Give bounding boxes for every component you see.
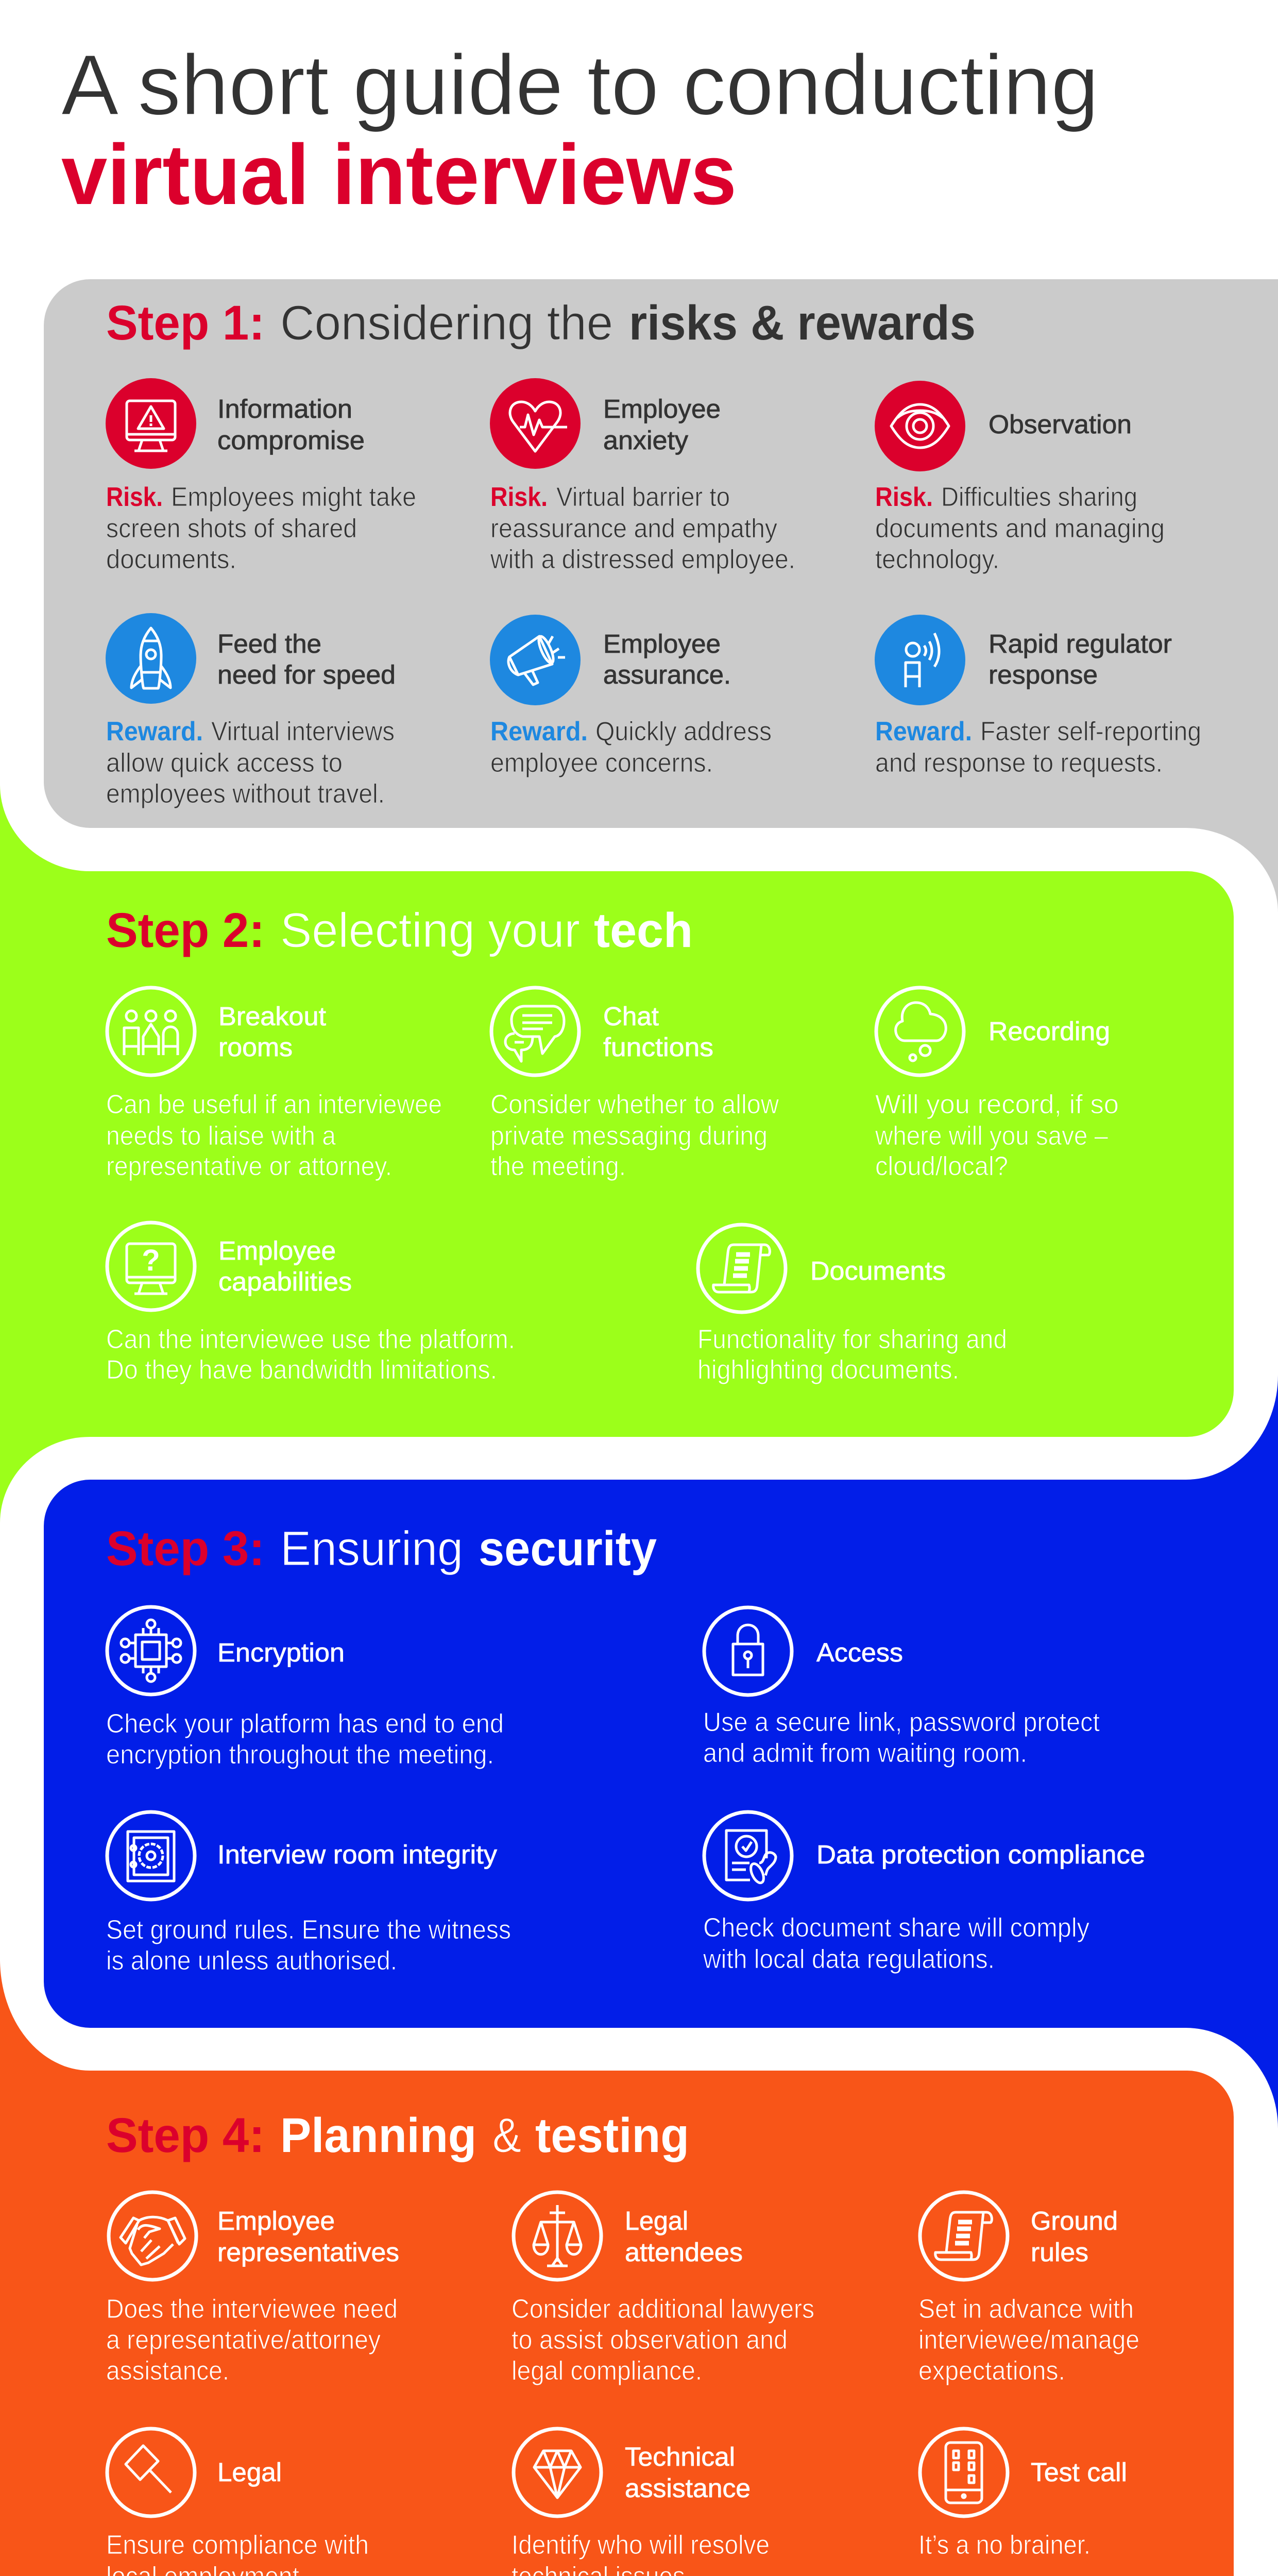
card: information compromise [106, 378, 416, 574]
title: employee capabilities: Employee [218, 1236, 336, 1265]
icon: smartphone [920, 2429, 1008, 2516]
title: employee anxiety: Employee [603, 394, 721, 423]
title: employee assurance: assurance. [603, 660, 731, 689]
body: observation: technology. [875, 545, 999, 574]
card: recording [875, 988, 1119, 1181]
title: technical assistance [625, 2442, 751, 2503]
body: employee assurance: Quickly address [595, 717, 772, 747]
icon: monitor question: ? [142, 1244, 160, 1277]
body: observation: Risk. [875, 482, 933, 512]
title: A short guide to conducting [61, 38, 1099, 133]
body: feed the need for speed: Virtual interviews [211, 717, 395, 747]
title: employee anxiety: anxiety [603, 426, 689, 455]
heading: step 3: Ensuring [280, 1521, 463, 1576]
icon: megaphone [490, 615, 581, 705]
title: access: Access [816, 1638, 903, 1667]
title: technical assistance: Technical [625, 2442, 735, 2471]
body: legal attendees: legal compliance. [512, 2356, 702, 2386]
background colour corners behind white ribbons [0, 762, 1278, 2576]
body: data protection compliance [703, 1913, 1089, 1974]
body: information compromise: Risk. [106, 482, 163, 512]
body: employee capabilities: Can the interviewee use the platform. [106, 1325, 515, 1354]
body: ground rules [918, 2294, 1139, 2386]
title: breakout rooms: rooms [218, 1032, 293, 1062]
body: observation: documents and managing [875, 514, 1165, 544]
title: employee assurance: Employee [603, 629, 721, 658]
title: employee assurance [603, 629, 731, 689]
body: employee representatives: assistance. [106, 2356, 229, 2386]
title: legal attendees: attendees [625, 2238, 743, 2267]
body: employee anxiety: Virtual barrier to [556, 482, 730, 512]
card: feed the need for speed [106, 613, 396, 809]
body: feed the need for speed: employees without travel. [106, 779, 385, 809]
body: breakout rooms: needs to liaise with a [106, 1121, 336, 1151]
body: interview room integrity [106, 1915, 511, 1976]
body: encryption: Check your platform has end to end [106, 1709, 504, 1739]
icon: scales of justice [514, 2192, 601, 2280]
icon: diamond [514, 2429, 601, 2516]
body: legal [106, 2530, 369, 2576]
body: information compromise: screen shots of shared [106, 514, 357, 544]
panel: step 3 ensuring security [44, 1480, 1278, 2028]
card: chat functions [490, 988, 779, 1181]
body: data protection compliance: with local data regulations. [703, 1944, 995, 1974]
title: rapid regulator response: response [989, 660, 1098, 689]
title: documents: Documents [810, 1256, 946, 1285]
body: documents: Functionality for sharing and [697, 1325, 1007, 1354]
body: recording: Will you record, if so [875, 1090, 1119, 1120]
title: breakout rooms [218, 1002, 326, 1062]
title: employee capabilities: capabilities [218, 1267, 352, 1296]
body: test call: It’s a no brainer. [918, 2530, 1090, 2560]
body: rapid regulator response: Faster self-reporting [980, 717, 1201, 747]
card: ground rules [918, 2192, 1139, 2386]
body: encryption: encryption throughout the meeting. [106, 1740, 494, 1770]
title: employee representatives: Employee [217, 2206, 335, 2235]
body: feed the need for speed: allow quick access to [106, 748, 343, 778]
body: employee representatives: Does the interviewee need [106, 2294, 398, 2324]
heading: step 2: tech [594, 903, 693, 958]
heading: step 4: Planning [280, 2108, 476, 2163]
body: technical assistance: Identify who will resolve [512, 2530, 770, 2560]
body: documents [697, 1325, 1007, 1385]
title: employee representatives [217, 2206, 399, 2267]
body: employee anxiety [490, 482, 795, 574]
icon: document scroll [698, 1225, 786, 1312]
card: test call [918, 2429, 1127, 2560]
title: ground rules [1031, 2206, 1118, 2267]
icon: microchip [107, 1607, 195, 1694]
body: chat functions: Consider whether to allow [490, 1090, 779, 1120]
title: encryption: Encryption [217, 1638, 345, 1667]
body: ground rules: interviewee/manage [918, 2325, 1139, 2355]
heading: step 1 [106, 296, 976, 350]
body: employee representatives: a representative/attorney [106, 2325, 381, 2355]
heading: step 2 [106, 903, 693, 958]
heading: step 3: Step 3: [106, 1521, 265, 1576]
body: legal: Ensure compliance with [106, 2530, 369, 2560]
body: access [703, 1707, 1100, 1768]
icon: stamped document [704, 1812, 792, 1900]
icon: handshake [109, 2192, 196, 2280]
body: employee anxiety: reassurance and empathy [490, 514, 777, 544]
body: recording: cloud/local? [875, 1151, 1008, 1181]
card: observation [875, 381, 1165, 574]
body: breakout rooms: representative or attorney. [106, 1151, 392, 1181]
body: observation [875, 482, 1165, 574]
body: feed the need for speed: Reward. [106, 717, 203, 747]
title: data protection compliance: Data protection compliance [816, 1840, 1145, 1869]
heading: step 4 [106, 2108, 689, 2163]
icon: three people [107, 988, 195, 1075]
title: observation: Observation [989, 410, 1132, 439]
body: information compromise: Employees might take [171, 482, 416, 512]
card: interview room integrity [106, 1812, 511, 1976]
body: rapid regulator response [875, 717, 1201, 778]
heading: step 2: Selecting your [280, 903, 580, 958]
title: employee capabilities [218, 1236, 352, 1296]
heading: step 1: Considering the [280, 296, 613, 350]
title: information compromise: compromise [217, 426, 365, 455]
title: test call: Test call [1031, 2458, 1127, 2487]
body: employee anxiety: with a distressed employee. [490, 545, 795, 574]
body: employee assurance: Reward. [490, 717, 588, 747]
title: employee anxiety [603, 394, 721, 455]
heading: step 1: Step 1: [106, 296, 265, 350]
body: recording: where will you save – [875, 1121, 1108, 1151]
title: feed the need for speed: Feed the [217, 629, 321, 658]
body: rapid regulator response: Reward. [875, 717, 972, 747]
heading: step 1: risks & rewards [629, 296, 976, 350]
title: chat functions [603, 1002, 713, 1062]
card: access [703, 1607, 1100, 1768]
title: interview room integrity: Interview room integrity [217, 1840, 498, 1869]
icon: cloud storage [876, 988, 964, 1075]
title: virtual interviews [61, 127, 737, 223]
card: employee representatives [106, 2192, 399, 2386]
body: employee assurance: employee concerns. [490, 748, 713, 778]
body: information compromise [106, 482, 416, 574]
body: interview room integrity: is alone unless authorised. [106, 1946, 397, 1976]
body: employee anxiety: Risk. [490, 482, 548, 512]
title: technical assistance: assistance [625, 2473, 751, 2503]
card: rapid regulator response [875, 615, 1201, 778]
body: employee capabilities [106, 1325, 515, 1385]
icon: monitor question [107, 1223, 195, 1310]
card: documents [697, 1225, 1007, 1385]
card: employee anxiety [490, 378, 795, 574]
title: chat functions: Chat [603, 1002, 659, 1031]
panel: step 1 risks and rewards [44, 279, 1278, 828]
card: legal attendees [512, 2192, 814, 2386]
body: legal attendees [512, 2294, 814, 2386]
icon: chat bubbles [491, 988, 579, 1075]
card: employee assurance [490, 615, 772, 778]
icon: padlock [704, 1607, 792, 1695]
body: information compromise: documents. [106, 545, 236, 574]
heading: step 2: Step 2: [106, 903, 265, 958]
icon: eye [875, 381, 965, 471]
title: legal: Legal [217, 2458, 282, 2487]
body: ground rules: Set in advance with [918, 2294, 1134, 2324]
icon: safe [107, 1812, 195, 1900]
body: legal attendees: Consider additional lawyers [512, 2294, 814, 2324]
body: chat functions [490, 1090, 779, 1181]
icon: monitor warning [106, 378, 196, 469]
body: employee assurance [490, 717, 772, 778]
heading: step 3: security [479, 1521, 657, 1576]
body: legal attendees: to assist observation and [512, 2325, 788, 2355]
card: technical assistance [512, 2429, 770, 2576]
body: breakout rooms: Can be useful if an interviewee [106, 1090, 442, 1120]
card: encryption [106, 1607, 504, 1770]
body: interview room integrity: Set ground rules. Ensure the witness [106, 1915, 511, 1945]
body: observation: Difficulties sharing [941, 482, 1137, 512]
title: ground rules: rules [1031, 2238, 1088, 2267]
body: documents: highlighting documents. [697, 1355, 959, 1385]
body: employee representatives [106, 2294, 398, 2386]
heading: step 4: & [492, 2108, 521, 2163]
heading: step 4: testing [535, 2108, 689, 2163]
title: rapid regulator response: Rapid regulator [989, 629, 1172, 658]
body: encryption [106, 1709, 504, 1770]
body: employee capabilities: Do they have bandwidth limitations. [106, 1355, 497, 1385]
body: technical assistance [512, 2530, 770, 2576]
title: recording: Recording [989, 1016, 1110, 1046]
icon: rules scroll [920, 2192, 1008, 2280]
title: information compromise [217, 394, 365, 455]
body: chat functions: the meeting. [490, 1151, 626, 1181]
body: feed the need for speed [106, 717, 395, 809]
title: rapid regulator response [989, 629, 1172, 689]
panel: step 4 planning and testing [0, 2071, 1234, 2576]
title: chat functions: functions [603, 1032, 713, 1062]
icon: person broadcasting [875, 615, 965, 705]
body: access: Use a secure link, password protect [703, 1707, 1100, 1737]
heading: step 4: Step 4: [106, 2108, 265, 2163]
title: ground rules: Ground [1031, 2206, 1118, 2235]
title: employee representatives: representatives [217, 2238, 399, 2267]
card: data protection compliance [703, 1812, 1145, 1974]
body: breakout rooms [106, 1090, 442, 1181]
title: legal attendees: Legal [625, 2206, 688, 2235]
card: legal [106, 2429, 369, 2576]
card: breakout rooms [106, 988, 442, 1181]
body: access: and admit from waiting room. [703, 1738, 1027, 1768]
body: data protection compliance: Check document share will comply [703, 1913, 1089, 1943]
title: legal attendees [625, 2206, 743, 2267]
title: breakout rooms: Breakout [218, 1002, 326, 1031]
body: chat functions: private messaging during [490, 1121, 768, 1151]
icon: heart pulse [490, 378, 581, 469]
title: feed the need for speed: need for speed [217, 660, 396, 689]
body: recording [875, 1090, 1119, 1181]
title: information compromise: Information [217, 394, 352, 423]
body: rapid regulator response: and response to requests. [875, 748, 1163, 778]
body: ground rules: expectations. [918, 2356, 1065, 2386]
card: employee capabilities [106, 1223, 515, 1385]
title [61, 38, 1099, 223]
heading: step 3 [106, 1521, 657, 1576]
title: feed the need for speed [217, 629, 396, 689]
icon: gavel [107, 2429, 195, 2516]
icon: rocket [106, 613, 196, 704]
panel: step 2 selecting your tech [0, 871, 1234, 1437]
